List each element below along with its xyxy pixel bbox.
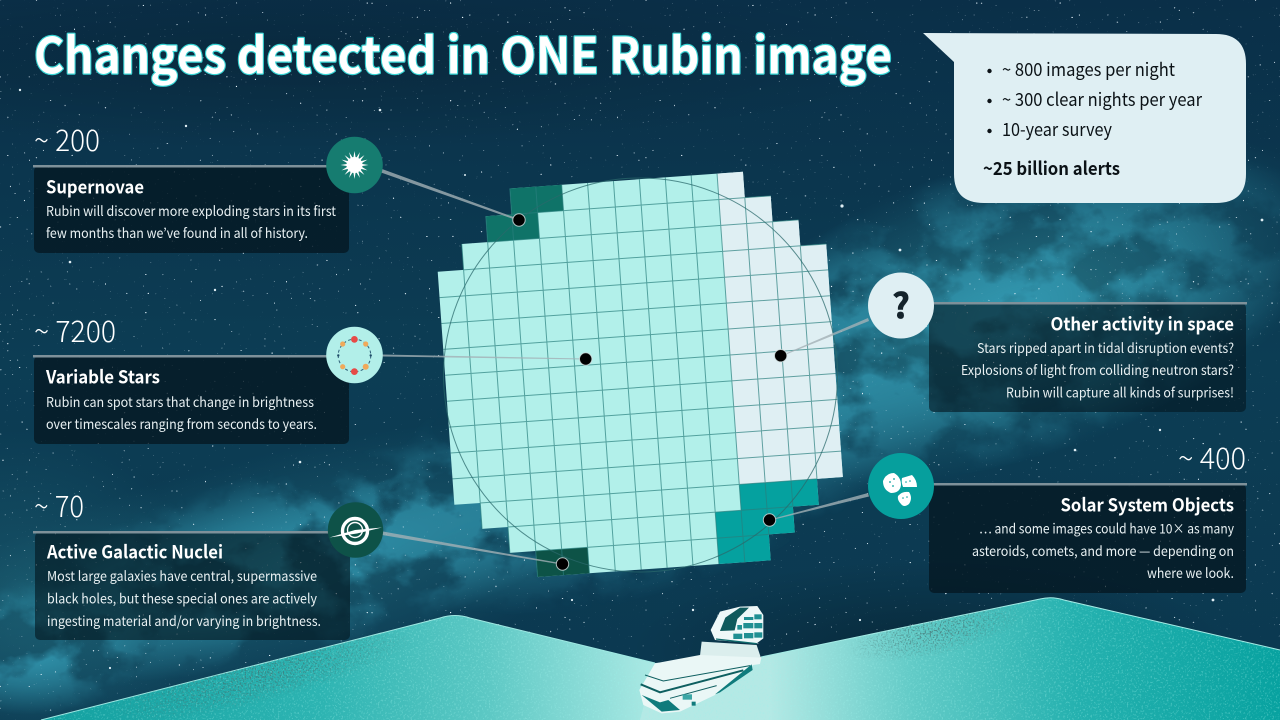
panel: other activity in space: Rubin will capture all kinds of surprises!	[1006, 382, 1234, 402]
panel: other activity in space: Stars ripped apart in tidal disruption events?	[977, 337, 1234, 357]
grid lines	[432, 166, 848, 582]
panel: solar system objects: … and some images could have 10× as many	[979, 518, 1234, 538]
panel: active galactic nuclei: ingesting material and/or varying in brightness.	[47, 610, 321, 630]
callout: survey stats: 10-year survey	[1002, 116, 1113, 142]
light teal detector cells	[432, 166, 848, 582]
panel: active galactic nuclei	[33, 482, 383, 640]
icon: asteroids	[868, 453, 934, 519]
callout: survey stats	[923, 33, 1246, 203]
panel: solar system objects: asteroids, comets, and more — depending on	[972, 540, 1234, 560]
green cells: supernovae	[484, 185, 565, 242]
telescope	[639, 606, 763, 713]
panel: other activity in space: Other activity in space	[1050, 310, 1234, 336]
icon: black hole	[328, 502, 383, 558]
panel: solar system objects: Solar System Objects	[1060, 492, 1234, 518]
panel: variable stars	[33, 307, 383, 444]
icon: question mark	[868, 272, 934, 338]
panel: other activity in space: Explosions of light from colliding neutron stars?	[961, 359, 1234, 379]
panel: variable stars: Rubin can spot stars that change in brightness	[46, 391, 314, 411]
panel: supernovae: few months than we’ve found in all of history.	[46, 222, 308, 242]
callout: survey stats: ~25 billion alerts	[983, 155, 1120, 181]
panel: active galactic nuclei: Active Galactic Nuclei	[46, 538, 223, 564]
icon: supernova burst	[326, 137, 383, 193]
panel: other activity in space	[868, 272, 1247, 412]
panel: variable stars: Variable Stars	[45, 364, 160, 390]
title: Changes detected in ONE Rubin image	[34, 16, 892, 88]
target dots	[513, 214, 787, 570]
dark cells: active galactic nuclei	[536, 547, 589, 577]
panel: supernovae: Rubin will discover more exploding stars in its first	[46, 200, 336, 220]
callout: survey stats: ~ 300 clear nights per year	[1002, 86, 1203, 112]
panel: supernovae: ~ 200	[34, 116, 100, 160]
icon: pulsating star ring	[326, 327, 383, 383]
panel: supernovae	[33, 116, 383, 253]
panel: solar system objects: ~ 400	[1178, 434, 1246, 478]
sensor grid chart	[432, 166, 848, 582]
panel: solar system objects	[868, 434, 1247, 593]
icon: question mark: ?	[892, 279, 910, 328]
panel: active galactic nuclei: Most large galaxies have central, supermassive	[47, 565, 317, 585]
callout: survey stats: ~ 800 images per night	[1002, 56, 1175, 82]
teal cells: solar system objects	[713, 479, 822, 564]
panel: active galactic nuclei: ~ 70	[34, 482, 84, 526]
panel: active galactic nuclei: black holes, but these special ones are actively	[47, 588, 317, 608]
panel: supernovae: Supernovae	[46, 174, 144, 200]
mountains	[40, 597, 1280, 720]
panel: solar system objects: where we look.	[1147, 562, 1234, 582]
white cells: other activity	[717, 166, 843, 484]
focal plane circle	[444, 178, 838, 572]
panel: variable stars: ~ 7200	[34, 307, 116, 351]
leader lines	[381, 169, 869, 565]
panel: variable stars: over timescales ranging from seconds to years.	[46, 413, 317, 433]
